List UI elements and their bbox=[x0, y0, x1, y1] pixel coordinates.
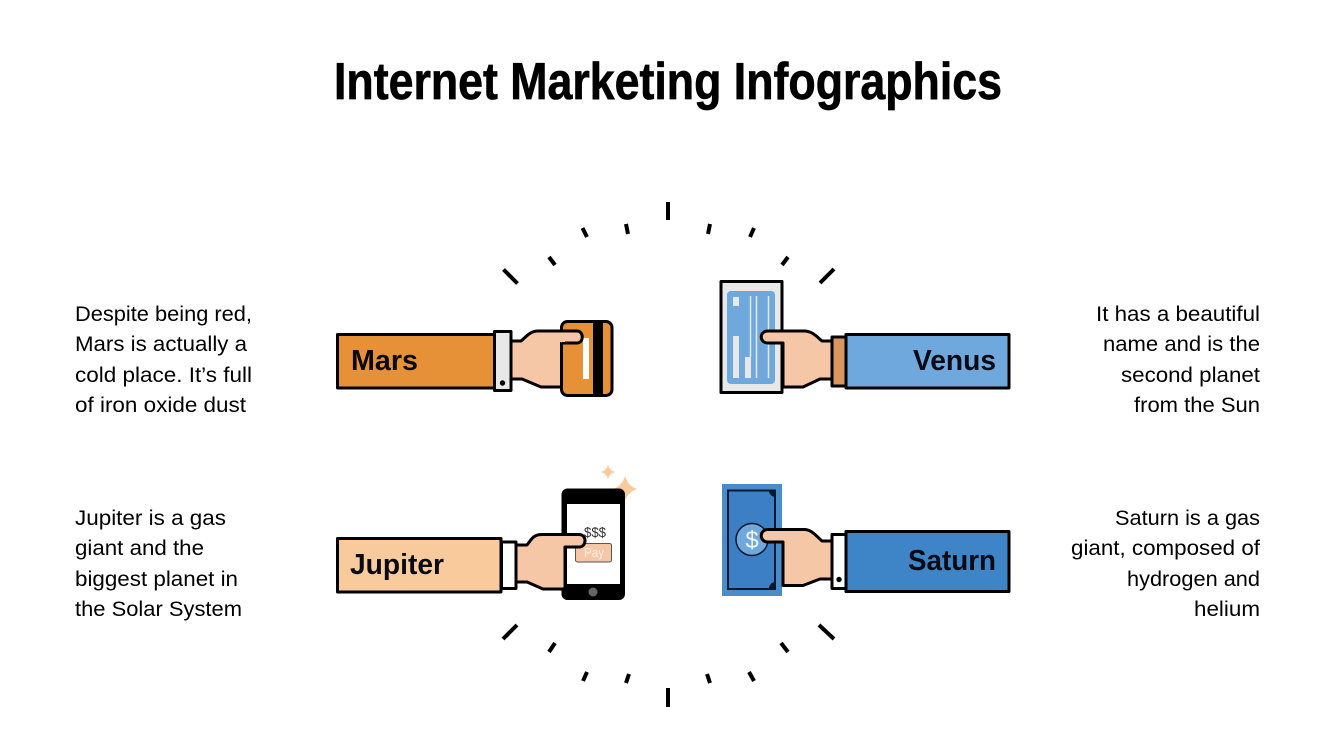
text block: Saturn description bbox=[1071, 507, 1260, 621]
text block: Jupiter description: biggest planet in bbox=[75, 568, 238, 591]
text block: Venus description: from the Sun bbox=[1134, 394, 1260, 417]
Mars credit card bbox=[562, 321, 612, 396]
Jupiter phone bbox=[562, 488, 625, 600]
text block: Venus description: name and is the bbox=[1103, 333, 1260, 356]
radial tick marks: bottom bbox=[503, 625, 834, 707]
text block: Saturn description: giant, composed of bbox=[1071, 537, 1260, 560]
Venus label: Venus bbox=[913, 345, 996, 377]
Jupiter sparkles bbox=[601, 465, 637, 501]
text block: Mars description: of iron oxide dust bbox=[75, 394, 246, 417]
radial tick marks: top bbox=[504, 202, 834, 284]
text block: Mars description bbox=[75, 303, 252, 417]
Saturn dollar bill bbox=[722, 484, 782, 596]
Mars cuff bbox=[494, 332, 511, 390]
text block: Jupiter description: Jupiter is a gas bbox=[75, 507, 226, 530]
panel: Venus hand with cheque bbox=[721, 282, 1009, 392]
Saturn label: Saturn bbox=[908, 545, 996, 577]
Venus hand bbox=[761, 331, 832, 387]
text block: Venus description: second planet bbox=[1121, 364, 1260, 387]
text block: Mars description: Mars is actually a bbox=[75, 333, 247, 356]
Mars finger fill patch bbox=[545, 333, 565, 342]
Jupiter cuff bbox=[502, 542, 516, 588]
text block: Jupiter description bbox=[75, 507, 242, 621]
Saturn cuff bbox=[832, 534, 846, 588]
text block: Saturn description: Saturn is a gas bbox=[1115, 507, 1260, 530]
text block: Mars description: Despite being red, bbox=[75, 303, 252, 326]
text block: Venus description bbox=[1096, 303, 1260, 417]
Venus sleeve bbox=[846, 334, 1009, 388]
Saturn sleeve bbox=[846, 532, 1009, 592]
Mars hand bbox=[511, 331, 582, 387]
text block: Saturn description: hydrogen and bbox=[1127, 568, 1260, 591]
Saturn dollar bill: $ bbox=[745, 527, 759, 554]
text block: Mars description: cold place. It’s full bbox=[75, 364, 252, 387]
Jupiter label: Jupiter bbox=[350, 549, 444, 581]
Jupiter sleeve bbox=[338, 538, 501, 592]
text block: Jupiter description: the Solar System bbox=[75, 598, 242, 621]
text block: Saturn description: helium bbox=[1194, 598, 1260, 621]
Jupiter hand bbox=[516, 534, 585, 589]
Mars sleeve bbox=[338, 334, 494, 388]
title: Internet Marketing Infographics bbox=[334, 53, 1002, 111]
panel: Saturn hand with dollar bill bbox=[722, 484, 1009, 596]
Jupiter phone: $$$ bbox=[584, 524, 606, 540]
text block: Jupiter description: giant and the bbox=[75, 537, 204, 560]
Venus cuff bbox=[832, 337, 846, 386]
Mars label: Mars bbox=[351, 345, 418, 377]
Mars finger bbox=[555, 331, 582, 343]
Venus cheque bbox=[721, 282, 782, 392]
Jupiter phone: Pay bbox=[584, 545, 604, 560]
panel: Mars hand with credit card bbox=[338, 321, 612, 396]
panel: Jupiter hand with phone bbox=[338, 465, 637, 600]
Saturn hand bbox=[761, 530, 832, 586]
text block: Venus description: It has a beautiful bbox=[1096, 303, 1260, 326]
